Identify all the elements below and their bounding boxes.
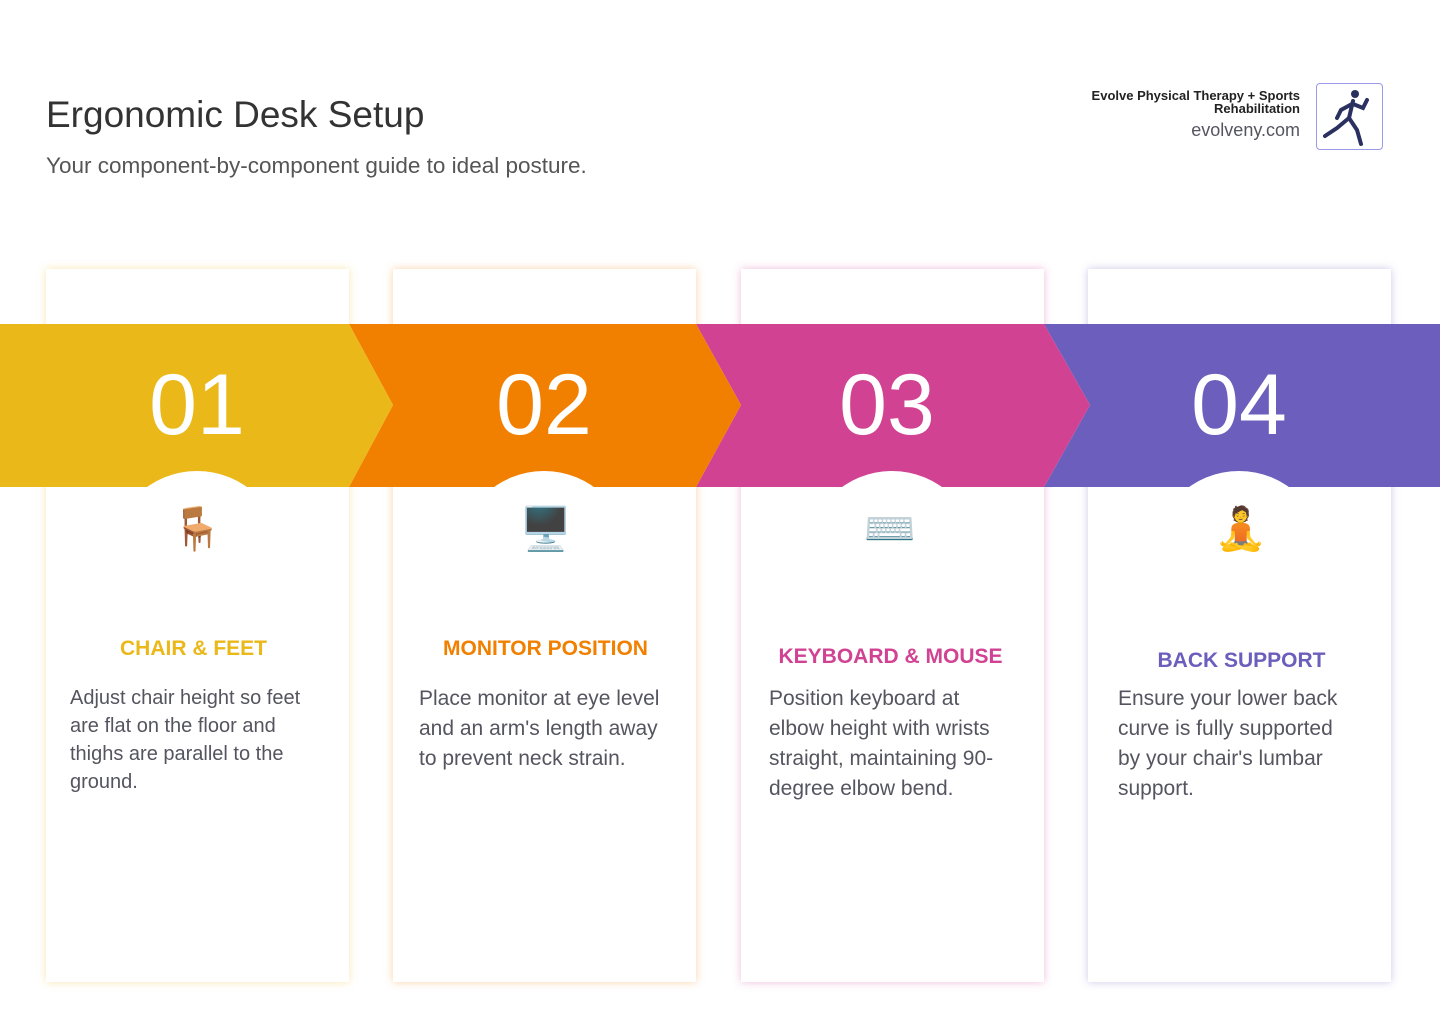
text: 02 xyxy=(496,357,592,453)
text: Place monitor at eye level and an arm's length away to prevent neck strain. xyxy=(419,687,659,770)
icon: meditation: 🧘 xyxy=(1215,505,1267,554)
icon: runner logo xyxy=(1316,83,1383,150)
subtitle: Your component-by-component guide to ideal posture. xyxy=(46,153,587,178)
icon: keyboard: ⌨️ xyxy=(864,505,916,554)
panel 1 text: CHAIR & FEET xyxy=(120,637,267,660)
panel 2 text: MONITOR POSITION xyxy=(443,637,648,660)
logo block: evolveny.com xyxy=(1191,120,1300,140)
text: 03 xyxy=(839,357,935,453)
text: Adjust chair height so feet are flat on the floor and thighs are parallel to the ground. xyxy=(70,687,300,793)
panel 3 text: KEYBOARD & MOUSE xyxy=(778,645,1003,668)
icon: monitor: 🖥️ xyxy=(520,505,572,554)
logo block: Rehabilitation xyxy=(1214,101,1300,116)
text: Ensure your lower back curve is fully supported by your chair's lumbar support. xyxy=(1118,687,1337,800)
text: 04 xyxy=(1191,357,1287,453)
logo block: Evolve Physical Therapy + Sports xyxy=(1092,88,1300,103)
numbers: 01 xyxy=(149,357,245,453)
logo block xyxy=(1092,83,1383,150)
panel 4 text: BACK SUPPORT xyxy=(1157,649,1326,672)
icon: chair: 🪑 xyxy=(171,505,223,554)
title: Ergonomic Desk Setup xyxy=(46,94,424,135)
text: Position keyboard at elbow height with wrists straight, maintaining 90-degree elbow bend. xyxy=(769,687,993,800)
card shadows / cards xyxy=(46,269,349,982)
